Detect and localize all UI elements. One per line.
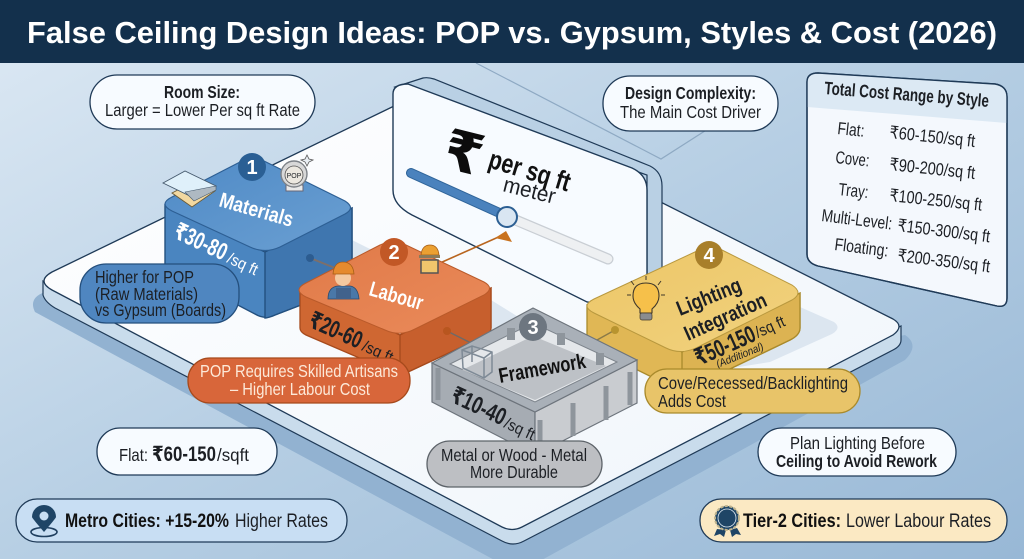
callout: metal or wood: More Durable — [470, 462, 558, 482]
rows: Cove: — [835, 147, 870, 171]
callout: metal or wood — [427, 441, 602, 487]
callout: metro cities — [16, 499, 347, 542]
rows: Flat: — [837, 118, 866, 141]
meter panel — [393, 78, 662, 310]
callout: room size: Larger = Lower Per sq ft Rate — [105, 100, 300, 120]
rows: Tray: — [838, 179, 870, 202]
callout: higher for POP: (Raw Materials) — [95, 284, 198, 304]
framework cost: ₹10-40 — [446, 382, 510, 431]
callout: room size — [90, 75, 315, 129]
framework cost: /sq ft — [501, 415, 538, 444]
callout: metro cities: Metro Cities: +15-20% — [65, 511, 229, 532]
block 3: framework — [432, 308, 637, 455]
callout: flat rate: Flat: — [119, 445, 148, 465]
framework label: Framework — [497, 350, 588, 388]
block 2: labour — [299, 238, 491, 374]
labour cost: /sq ft — [359, 338, 396, 367]
callout: plan lighting: Ceiling to Avoid Rework — [776, 451, 937, 471]
rows: ₹90-200/sq ft — [889, 154, 976, 183]
materials cost: /sq ft — [224, 250, 261, 279]
block 4: lighting integration — [587, 241, 800, 392]
connector: labour — [443, 327, 475, 345]
rows — [821, 118, 991, 276]
rows: Multi-Level: — [821, 205, 893, 234]
icon: medal — [714, 506, 741, 537]
background ceiling lines — [476, 63, 722, 159]
panel: total cost range by style — [807, 73, 1007, 306]
icon: board samples — [163, 171, 216, 207]
platform — [33, 89, 913, 559]
rows: ₹100-250/sq ft — [889, 185, 983, 215]
callout: room size: Room Size: — [164, 82, 240, 102]
callout: flat rate: /sqft — [217, 445, 249, 465]
callout: design complexity: Design Complexity: — [625, 83, 756, 103]
badge 3 — [519, 313, 547, 341]
rows: ₹60-150/sq ft — [889, 122, 976, 151]
arrow to meter — [440, 231, 512, 263]
callout: plan lighting — [758, 428, 956, 476]
callout: tier-2 cities — [700, 499, 1007, 542]
meter heading: per sq ft — [485, 144, 574, 197]
materials label: Materials — [217, 189, 296, 232]
rows: ₹200-350/sq ft — [897, 245, 991, 276]
callout: POP labour: – Higher Labour Cost — [230, 379, 370, 399]
callout: design complexity: The Main Cost Driver — [620, 102, 761, 122]
rows: ₹150-300/sq ft — [897, 215, 991, 246]
labour cost: ₹20-60 — [305, 307, 367, 354]
icon: helmet box — [419, 245, 440, 273]
callout: metro cities: Higher Rates — [235, 511, 328, 532]
callout: higher for POP: Higher for POP — [95, 267, 194, 287]
callout: cove lighting — [645, 369, 860, 413]
callout: higher for POP — [80, 264, 239, 323]
callout: POP labour: POP Requires Skilled Artisans — [200, 361, 398, 381]
icon: POP bag — [281, 155, 313, 191]
floor shadows — [300, 240, 838, 370]
badge 2 — [380, 238, 408, 266]
icon: map pin — [31, 505, 57, 536]
callout: plan lighting: Plan Lighting Before — [790, 433, 925, 453]
connector: lighting — [597, 326, 619, 340]
badge 4 — [695, 241, 723, 269]
badge 2: 2 — [388, 242, 400, 264]
callout: flat rate: ₹60-150 — [152, 443, 216, 466]
meter label: meter — [501, 172, 558, 209]
badge 3: 3 — [527, 317, 539, 339]
callout: flat rate — [97, 428, 277, 475]
icon: light bulb — [627, 276, 665, 320]
callout: design complexity — [603, 76, 778, 131]
connector: materials — [306, 254, 335, 268]
title: False Ceiling Design Ideas: POP vs. Gypsum, Styles & Cost (2026) — [27, 15, 997, 50]
materials cost: ₹30-80 — [169, 218, 232, 266]
badge 1: 1 — [246, 157, 258, 179]
rows: Floating: — [834, 234, 890, 261]
callout: cove lighting: Cove/Recessed/Backlighting — [658, 373, 848, 393]
callout: POP labour — [188, 358, 410, 403]
callout: cove lighting: Adds Cost — [658, 391, 726, 411]
icon: POP bag: POP — [287, 173, 302, 180]
slider — [411, 173, 608, 259]
lighting cost: /sq ft — [753, 313, 788, 342]
callout: metal or wood: Metal or Wood - Metal — [441, 445, 587, 465]
labour label: Labour — [367, 278, 426, 315]
badge 1 — [238, 153, 266, 181]
icon: metal frame — [462, 346, 492, 378]
lighting label: Integration — [681, 289, 770, 346]
lighting cost: (Additional) — [715, 341, 766, 371]
lighting cost: ₹50-150 — [690, 321, 760, 371]
icon: worker — [328, 262, 359, 299]
callout: tier-2 cities: Tier-2 Cities: — [743, 511, 841, 532]
block 1: materials — [163, 153, 352, 318]
rupee symbol: ₹ — [437, 117, 490, 188]
callout: tier-2 cities: Lower Labour Rates — [846, 511, 991, 532]
lighting label: Lighting — [673, 274, 745, 321]
callout: higher for POP: vs Gypsum (Boards) — [95, 300, 226, 320]
badge 4: 4 — [703, 245, 715, 267]
title bar — [0, 0, 1024, 63]
